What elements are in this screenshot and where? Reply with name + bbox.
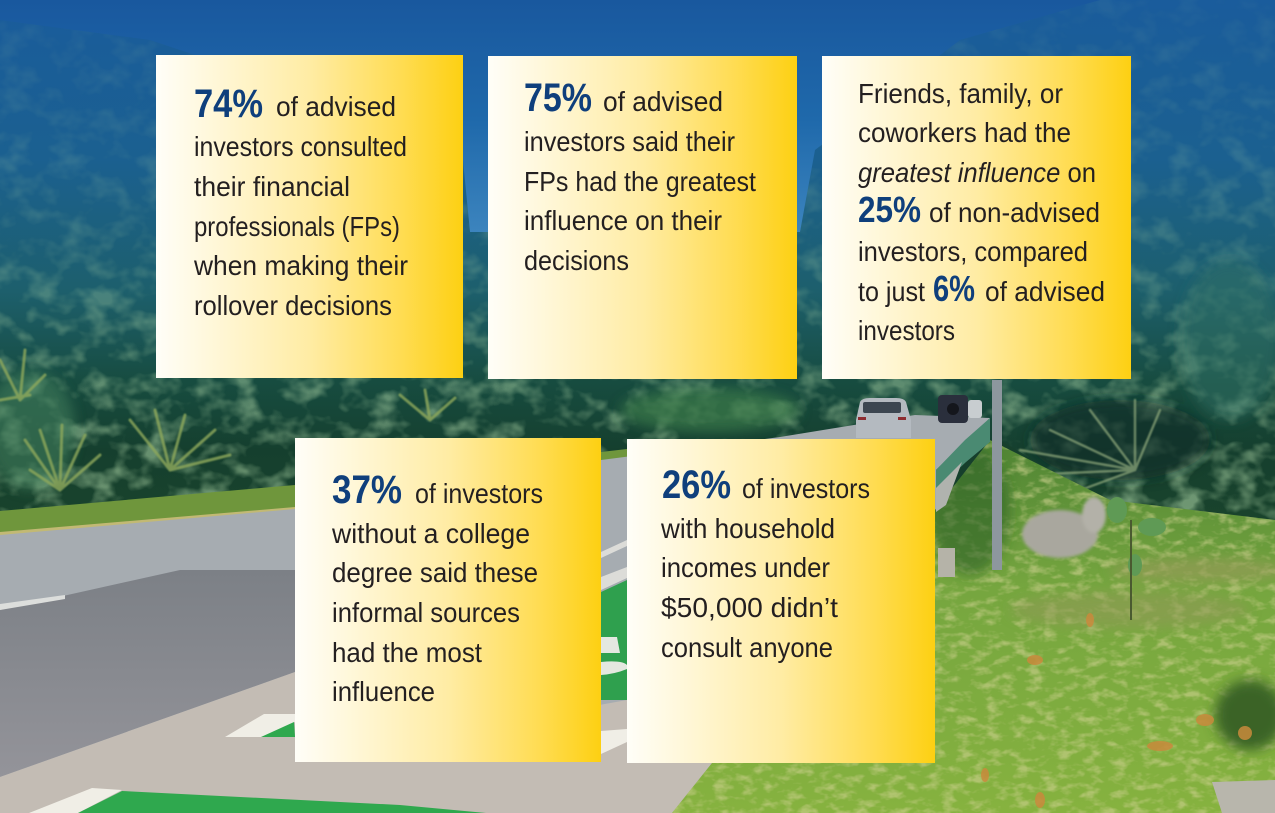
card: 37% no college degree (295, 438, 601, 762)
card: 26% under $50,000: consult anyone (661, 632, 833, 663)
card: friends, family, coworkers: of non-advised (929, 197, 1100, 228)
card: 75% greatest influence: 75% (524, 76, 592, 120)
dark backing behind lower foliage (0, 232, 1275, 572)
card: 74% consulted FPs: 74% (194, 82, 263, 126)
dark distant car (938, 395, 968, 423)
grass texture (660, 440, 1275, 813)
road markings (601, 540, 627, 590)
sidewalk (0, 672, 295, 813)
tree line (0, 0, 1275, 530)
card: friends, family, coworkers: Friends, family, or (858, 78, 1063, 109)
foliage texture (0, 0, 1275, 530)
card: 74% consulted FPs: when making their (193, 250, 408, 281)
bike symbol marks (601, 637, 627, 675)
stone post (938, 548, 955, 577)
card: 37% no college degree: had the most (332, 637, 482, 668)
card: 26% under $50,000: of investors (742, 473, 870, 504)
silver car (856, 398, 911, 438)
card: 26% under $50,000: incomes under (661, 552, 830, 583)
card: 37% no college degree: of investors (415, 478, 543, 509)
card: friends, family, coworkers: investors (858, 315, 955, 346)
sapling leaves (1107, 497, 1166, 620)
card: friends, family, coworkers: greatest influence on (858, 157, 1096, 188)
grass strip mid (601, 449, 627, 461)
card: 75% greatest influence: investors said their (524, 126, 735, 157)
card: 74% consulted FPs: of advised (276, 91, 396, 122)
grass strip left (0, 485, 295, 533)
signpost (992, 380, 1002, 570)
card: friends, family, coworkers: of advised (985, 276, 1105, 307)
card: 75% greatest influence (488, 56, 797, 379)
road edge line (0, 507, 295, 535)
curb (936, 462, 962, 512)
green bike lane (601, 580, 627, 700)
card: 75% greatest influence: decisions (524, 245, 629, 276)
card: 26% under $50,000 (627, 439, 935, 763)
card: friends, family, coworkers (822, 56, 1131, 379)
card: 75% greatest influence: of advised (603, 86, 723, 117)
white distant car (968, 400, 982, 418)
fallen leaves (981, 613, 1252, 808)
card: friends, family, coworkers: coworkers had the (858, 117, 1071, 148)
card: friends, family, coworkers: 25% (858, 189, 921, 230)
card: 74% consulted FPs: investors consulted (194, 131, 407, 162)
card: 75% greatest influence: influence on their (524, 205, 722, 236)
concrete slab bottom right (1212, 780, 1275, 813)
card: 75% greatest influence: FPs had the greatest (524, 166, 756, 197)
card: 26% under $50,000: $50,000 didn’t (661, 592, 838, 623)
card: 74% consulted FPs: professionals (FPs) (194, 211, 400, 242)
card: 26% under $50,000: 26% (662, 463, 731, 507)
lane line (0, 595, 65, 610)
card: 37% no college degree: degree said these (332, 557, 538, 588)
card: 37% no college degree: influence (332, 676, 435, 707)
card: friends, family, coworkers: to just (858, 276, 925, 307)
card: 37% no college degree: without a college (331, 518, 530, 549)
card: 26% under $50,000: with household (660, 513, 835, 544)
card: 37% no college degree: 37% (332, 468, 402, 512)
palm fronds left (0, 350, 455, 490)
card: 74% consulted FPs: their financial (194, 171, 350, 202)
darker asphalt lane (0, 570, 295, 777)
rock (1022, 497, 1106, 558)
card: 37% no college degree: informal sources (332, 597, 520, 628)
sky (0, 0, 1275, 240)
card: friends, family, coworkers: 6% (933, 268, 975, 309)
road surface (0, 415, 990, 813)
card: friends, family, coworkers: investors, compared (858, 236, 1088, 267)
palm fan right (1020, 400, 1160, 505)
grass right (672, 440, 1275, 813)
green far lane (936, 418, 990, 490)
card: 74% consulted FPs (156, 55, 463, 378)
card: 74% consulted FPs: rollover decisions (194, 290, 392, 321)
